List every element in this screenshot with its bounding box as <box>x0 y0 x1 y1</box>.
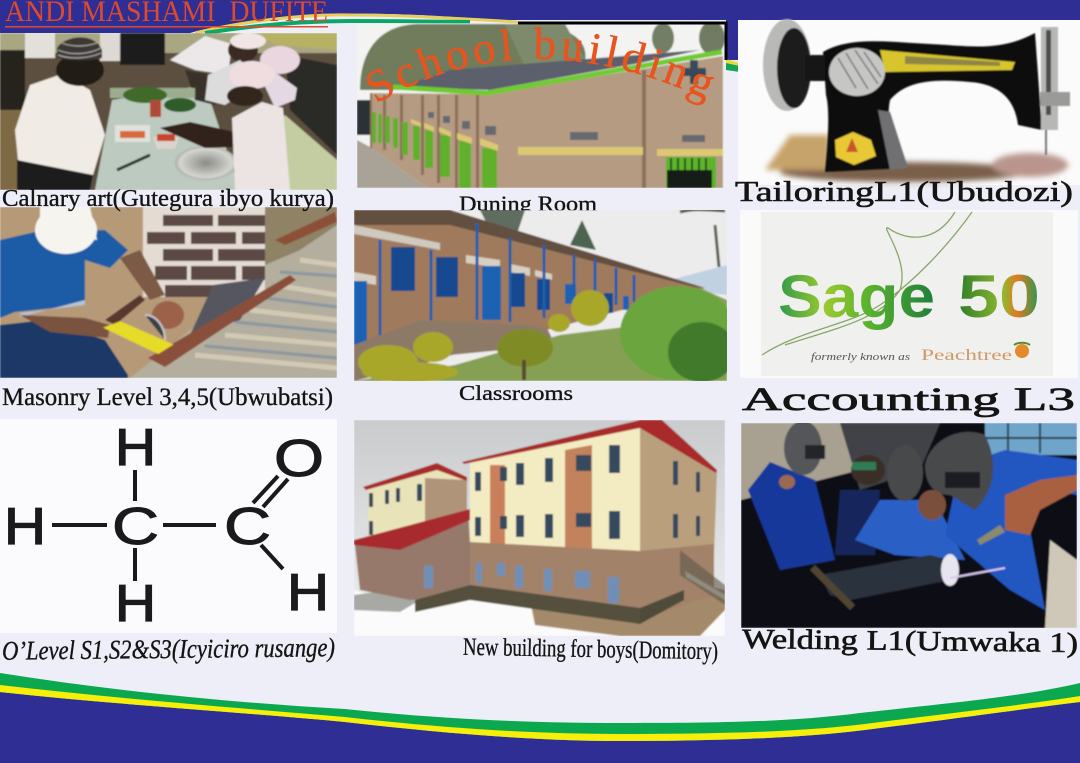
panel: chemical structure: H <box>287 564 329 622</box>
panel: chemical structure: O <box>274 430 324 488</box>
panel: tailoring sewing machine photo <box>738 19 1080 185</box>
panel: chemical structure: C <box>224 498 271 556</box>
panel: Sage 50 accounting logo: Peachtree <box>921 347 1012 364</box>
bottom navy wave with green and yellow stripes <box>0 673 1080 763</box>
caption: tailoring: TailoringL1(Ubudozi) <box>735 176 1073 208</box>
panel: school building photo <box>357 22 728 188</box>
panel: Sage 50 accounting logo: formerly known as <box>811 351 910 363</box>
caption: accounting: Accounting L3 <box>742 382 1075 418</box>
panel: Sage 50 accounting logo: 50 <box>958 263 1040 330</box>
caption: O level: O’Level S1,S2&S3(Icyiciro rusange) <box>2 632 335 666</box>
panel: chemical structure: H <box>115 419 156 477</box>
top navy banner <box>0 0 1080 72</box>
panel: chemical structure: H <box>115 575 156 633</box>
caption: dining room: Duning Room <box>459 191 597 216</box>
panel: Sage 50 accounting logo: Sage <box>778 263 935 330</box>
panel: classrooms photo <box>354 210 736 382</box>
caption: dormitory: New building for boys(Domitory) <box>463 634 718 665</box>
caption: welding: Welding L1(Umwaka 1) <box>742 624 1078 659</box>
panel: chemical structure: H <box>4 498 46 556</box>
panel: chemical structure <box>0 419 337 633</box>
panel: chemical structure: C <box>112 498 159 556</box>
panel: welding photo <box>741 421 1077 628</box>
curved heading: school building: School building <box>366 27 714 106</box>
panel: dormitory building render <box>354 420 725 636</box>
panel: culinary art photo <box>0 33 337 190</box>
panel: masonry photo <box>0 206 337 378</box>
caption: masonry: Masonry Level 3,4,5(Ubwubatsi) <box>2 384 333 411</box>
caption: culinary art: Calnary art(Gutegura ibyo kurya) <box>2 186 334 212</box>
panel: Sage 50 accounting logo <box>740 210 1078 378</box>
caption: classrooms: Classrooms <box>459 381 573 405</box>
